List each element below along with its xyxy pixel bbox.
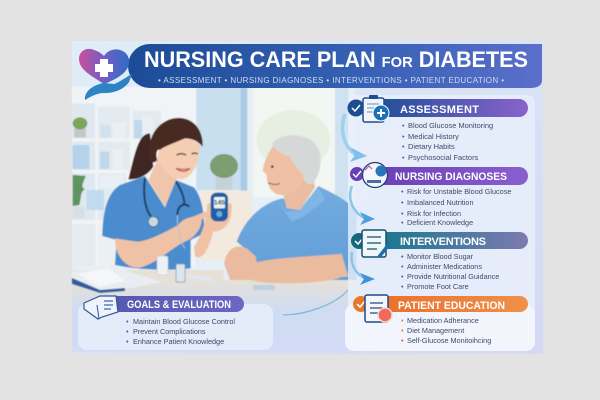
- list: [401, 252, 499, 291]
- list: •: [402, 153, 405, 162]
- list: Risk for Unstable Blood Glucose: [407, 187, 511, 196]
- cabinet: [200, 191, 252, 261]
- list: [401, 316, 491, 345]
- list: •: [401, 336, 404, 345]
- infographic background: [72, 41, 543, 354]
- medicine bottles: [157, 256, 275, 290]
- glucose meter: 145: [214, 200, 225, 207]
- list: •: [401, 187, 404, 196]
- list: •: [126, 317, 129, 326]
- pointing finger: [185, 210, 211, 223]
- header band: [128, 44, 542, 88]
- heading: INTERVENTIONS: [400, 236, 486, 248]
- panel: goals and evaluation: [78, 296, 273, 350]
- patient neck and face: [283, 167, 315, 210]
- band: [372, 99, 528, 117]
- curved arc accent: [283, 290, 348, 315]
- clipboard and folder: [72, 266, 163, 293]
- nurse right arm: [194, 203, 232, 257]
- room background: [72, 87, 355, 280]
- list: Promote Foot Care: [407, 282, 469, 291]
- heading: GOALS & EVALUATION: [127, 299, 231, 311]
- nurse scrubs: [102, 176, 204, 270]
- list: •: [401, 209, 404, 218]
- arrow: [350, 186, 375, 225]
- list: Imbalanced Nutrition: [407, 198, 474, 207]
- list: •: [401, 198, 404, 207]
- face: [157, 138, 199, 179]
- list: •: [401, 282, 404, 291]
- list: Deficient Knowledge: [407, 218, 473, 227]
- list: •: [402, 132, 405, 141]
- icon: heart in hand: [79, 49, 132, 100]
- heading: ASSESSMENT: [400, 104, 479, 116]
- stethoscope chestpiece: [148, 216, 159, 227]
- list: Psychosocial Factors: [408, 153, 479, 162]
- list: [402, 121, 493, 162]
- band: [374, 296, 528, 312]
- band: [372, 167, 528, 185]
- list: Risk for Infection: [407, 209, 461, 218]
- list: •: [401, 316, 404, 325]
- forearm overlap: [224, 254, 340, 283]
- list: [401, 187, 511, 227]
- list: •: [126, 327, 129, 336]
- stethoscope: [144, 178, 189, 248]
- neck: [148, 160, 177, 207]
- illustration: nurse and patient scene: [72, 87, 362, 352]
- hair: [149, 118, 203, 162]
- list: •: [401, 262, 404, 271]
- list: Maintain Blood Glucose Control: [133, 317, 235, 326]
- arrow: [352, 252, 375, 285]
- panel: interventions: [351, 230, 528, 291]
- icon: diagnosis globe: [350, 162, 388, 188]
- list: •: [401, 272, 404, 281]
- table lower section: [72, 280, 362, 310]
- list: Administer Medications: [407, 262, 482, 271]
- glucose meter: [211, 193, 228, 221]
- list: Medication Adherance: [407, 316, 479, 325]
- card: [78, 304, 273, 350]
- band: [372, 232, 528, 249]
- list: •: [401, 218, 404, 227]
- patient hair: [272, 135, 321, 184]
- panel: assessment: [342, 95, 528, 162]
- band: [105, 296, 244, 312]
- icon: checklist and pen: [351, 230, 390, 257]
- table: [72, 270, 224, 280]
- icon: clipboard with badge: [353, 295, 392, 322]
- list: [126, 317, 235, 346]
- list: •: [401, 326, 404, 335]
- list: Monitor Blood Sugar: [407, 252, 474, 261]
- plant on window sill: [210, 154, 238, 190]
- list: Prevent Complications: [133, 327, 206, 336]
- panel: nursing diagnoses: [350, 162, 528, 227]
- subtitle: • ASSESSMENT • NURSING DIAGNOSES • INTERVENTIONS • PATIENT EDUCATION •: [158, 76, 504, 85]
- list: Blood Glucose Monitoring: [408, 121, 493, 130]
- list: Dietary Habits: [408, 142, 455, 151]
- panel: right column background: [348, 95, 535, 350]
- patient arms: [224, 246, 348, 280]
- panel: patient education: [345, 295, 535, 351]
- list: •: [126, 337, 129, 346]
- header: [79, 44, 542, 100]
- list: Diet Management: [407, 326, 464, 335]
- list: Provide Nutritional Guidance: [407, 272, 499, 281]
- list: •: [402, 142, 405, 151]
- icon: clipboard with plus: [348, 95, 389, 122]
- list: Medical History: [408, 132, 459, 141]
- heading: PATIENT EDUCATION: [398, 300, 505, 312]
- nurse forearm left: [115, 217, 202, 268]
- shelves: [72, 87, 195, 267]
- heading: NURSING DIAGNOSES: [395, 171, 507, 183]
- icon: open book with checklist: [84, 296, 118, 319]
- arrow: [342, 114, 367, 162]
- patient shirt: [237, 186, 357, 280]
- list: •: [401, 252, 404, 261]
- list: Self-Glucose Monitoihcing: [407, 336, 491, 345]
- list: Enhance Patient Knowledge: [133, 337, 224, 346]
- list: •: [402, 121, 405, 130]
- white card: [345, 304, 535, 351]
- hair back: [128, 133, 153, 179]
- main title: NURSING CARE PLAN FOR DIABETES: [144, 47, 528, 72]
